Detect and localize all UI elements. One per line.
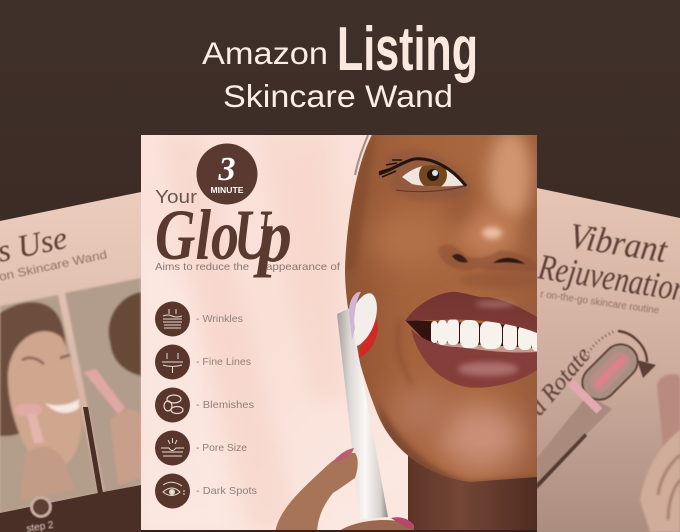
- badge label: MINUTE: [211, 185, 244, 195]
- subheading: aims to reduce: appearance of: [266, 262, 340, 273]
- icon: dark spots: [155, 474, 190, 508]
- item: blemishes: - Blemishes: [196, 400, 254, 411]
- arrow: rotate direction: [585, 331, 656, 378]
- subheading: aims to reduce: Aims to reduce the: [155, 262, 249, 273]
- mouth: teeth: [431, 319, 540, 351]
- item: fine lines: - Fine Lines: [196, 357, 251, 368]
- nail: thumb: [331, 448, 354, 464]
- title: skincare wand: Skincare Wand: [223, 78, 453, 114]
- item: pore size: [155, 430, 247, 466]
- item: pore size: - Pore Size: [196, 443, 247, 454]
- item: wrinkles: [155, 302, 243, 336]
- title: amazon: Amazon: [202, 35, 328, 71]
- heading: glo up: U: [234, 195, 273, 275]
- face skin: [345, 135, 537, 482]
- item: blemishes: [155, 388, 254, 422]
- photo: woman face: [345, 130, 540, 532]
- heading: vibrant rejuvenation: Vibrant: [567, 215, 671, 270]
- step marker icon: [32, 498, 50, 516]
- panel: main card: [141, 130, 540, 532]
- list: skin concerns: [155, 302, 257, 508]
- title: listing: Listing: [337, 15, 478, 84]
- icon: pore size: [155, 430, 190, 466]
- heading: glo up: Glo: [155, 195, 239, 275]
- mouth: interior: [405, 320, 532, 348]
- nose: [438, 244, 537, 272]
- item: wrinkles: - Wrinkles: [196, 314, 243, 325]
- badge: 3 minute: [196, 144, 258, 204]
- badge number: 3: [218, 151, 236, 188]
- subheading: r on-the-go skincare routine: [540, 289, 660, 317]
- photo: step 2 woman: [0, 295, 98, 513]
- icon: fine lines: [155, 344, 190, 380]
- subheading: aims to reduce: [155, 262, 340, 273]
- heading: vibrant rejuvenation: [535, 215, 680, 309]
- wand head: [349, 292, 378, 358]
- heading: your: Your: [155, 186, 197, 207]
- wand handle: [337, 308, 388, 519]
- paper texture streaks: [153, 139, 339, 527]
- rotate label: d Rotate: [525, 342, 597, 421]
- item: dark spots: [155, 474, 257, 508]
- hair wisps: [355, 135, 373, 175]
- lip highlights: [458, 300, 518, 376]
- panel: right card, vibrant rejuvenation: [525, 188, 680, 532]
- subheading: on Skincare Wand: [0, 247, 108, 284]
- photo: step 3 woman: [65, 278, 141, 493]
- nail: index finger: [391, 517, 414, 530]
- mouth: upper lip: [405, 292, 537, 333]
- hand: thumb: [275, 453, 358, 532]
- panel: left card, how to use: [0, 192, 141, 532]
- icon: blemishes: [155, 388, 190, 422]
- item: fine lines: [155, 344, 251, 380]
- wand device: [337, 292, 388, 519]
- hand: index finger: [341, 520, 414, 530]
- mouth: lower lip: [411, 329, 537, 388]
- face shading: [345, 130, 540, 495]
- icon: wrinkles: [155, 302, 190, 336]
- eye: [379, 149, 470, 202]
- dark footer band: [0, 485, 141, 532]
- hand with wand: [640, 374, 680, 532]
- neck: [408, 456, 537, 530]
- item: dark spots: - Dark Spots: [196, 486, 257, 497]
- title: [202, 15, 478, 114]
- wand illustration: [537, 335, 647, 489]
- heading: glo up: p: [253, 194, 292, 278]
